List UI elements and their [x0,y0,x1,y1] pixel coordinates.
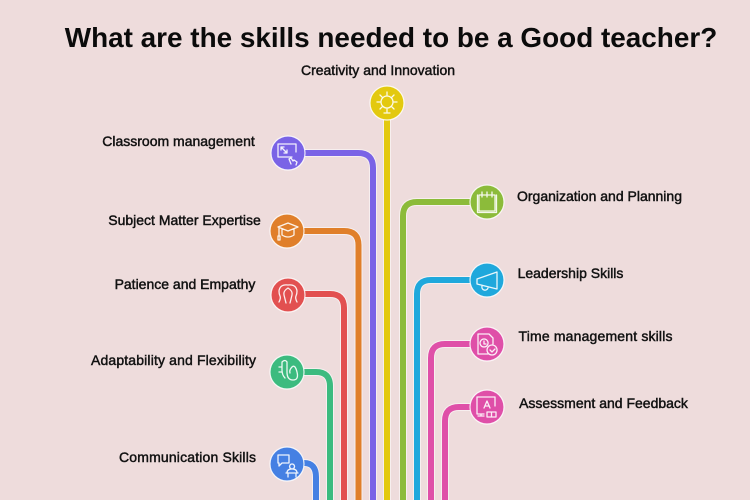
connector: purple [300,153,373,500]
icon: clock document [470,327,504,361]
label: Time management skills: Time management skills [518,328,672,344]
icon: touch screen [271,136,305,170]
icon: flexible figure [270,355,304,389]
icon: notepad [470,185,504,219]
icon: screen with letter and book [470,390,504,424]
connector: yellow [383,110,391,500]
icon: two heads [271,278,305,312]
icon: gear bulb [370,86,404,120]
connector: pink [431,344,475,500]
label: Classroom management: Classroom management [102,133,255,149]
label: Communication Skills: Communication Skills [119,449,256,465]
branch: Leadership Skills [417,263,623,500]
branch: Assessment and Feedback [445,390,689,500]
label: Adaptability and Flexibility: Adaptability and Flexibility [91,352,256,368]
branch: Creativity and Innovation [301,62,455,500]
label: Creativity and Innovation: Creativity and Innovation [301,62,455,78]
connector: olive [403,202,475,500]
icon: speech bubble and speaker [270,447,304,481]
label: Leadership Skills: Leadership Skills [518,265,623,281]
connector: magenta [445,407,475,500]
branch: Subject Matter Expertise [108,212,358,500]
connector: blue [300,463,316,500]
icon: megaphone [470,263,504,297]
connector: orange [300,231,358,500]
branch: Organization and Planning [403,185,682,500]
label: Subject Matter Expertise: Subject Matter Expertise [108,212,261,228]
branch: Patience and Empathy [115,276,344,500]
branch: Communication Skills [119,447,316,500]
label: Organization and Planning: Organization and Planning [517,188,682,204]
branch: Classroom management [102,133,373,500]
branch: Time management skills [431,327,672,500]
label: Patience and Empathy: Patience and Empathy [115,276,255,292]
connector: red [300,294,344,500]
branch: Adaptability and Flexibility [91,352,330,500]
title: What are the skills needed to be a Good teacher? [65,22,717,53]
icon: graduation cap [270,214,304,248]
connector: cyan [417,280,475,500]
label: Assessment and Feedback: Assessment and Feedback [519,395,689,411]
connector: green [300,372,330,500]
